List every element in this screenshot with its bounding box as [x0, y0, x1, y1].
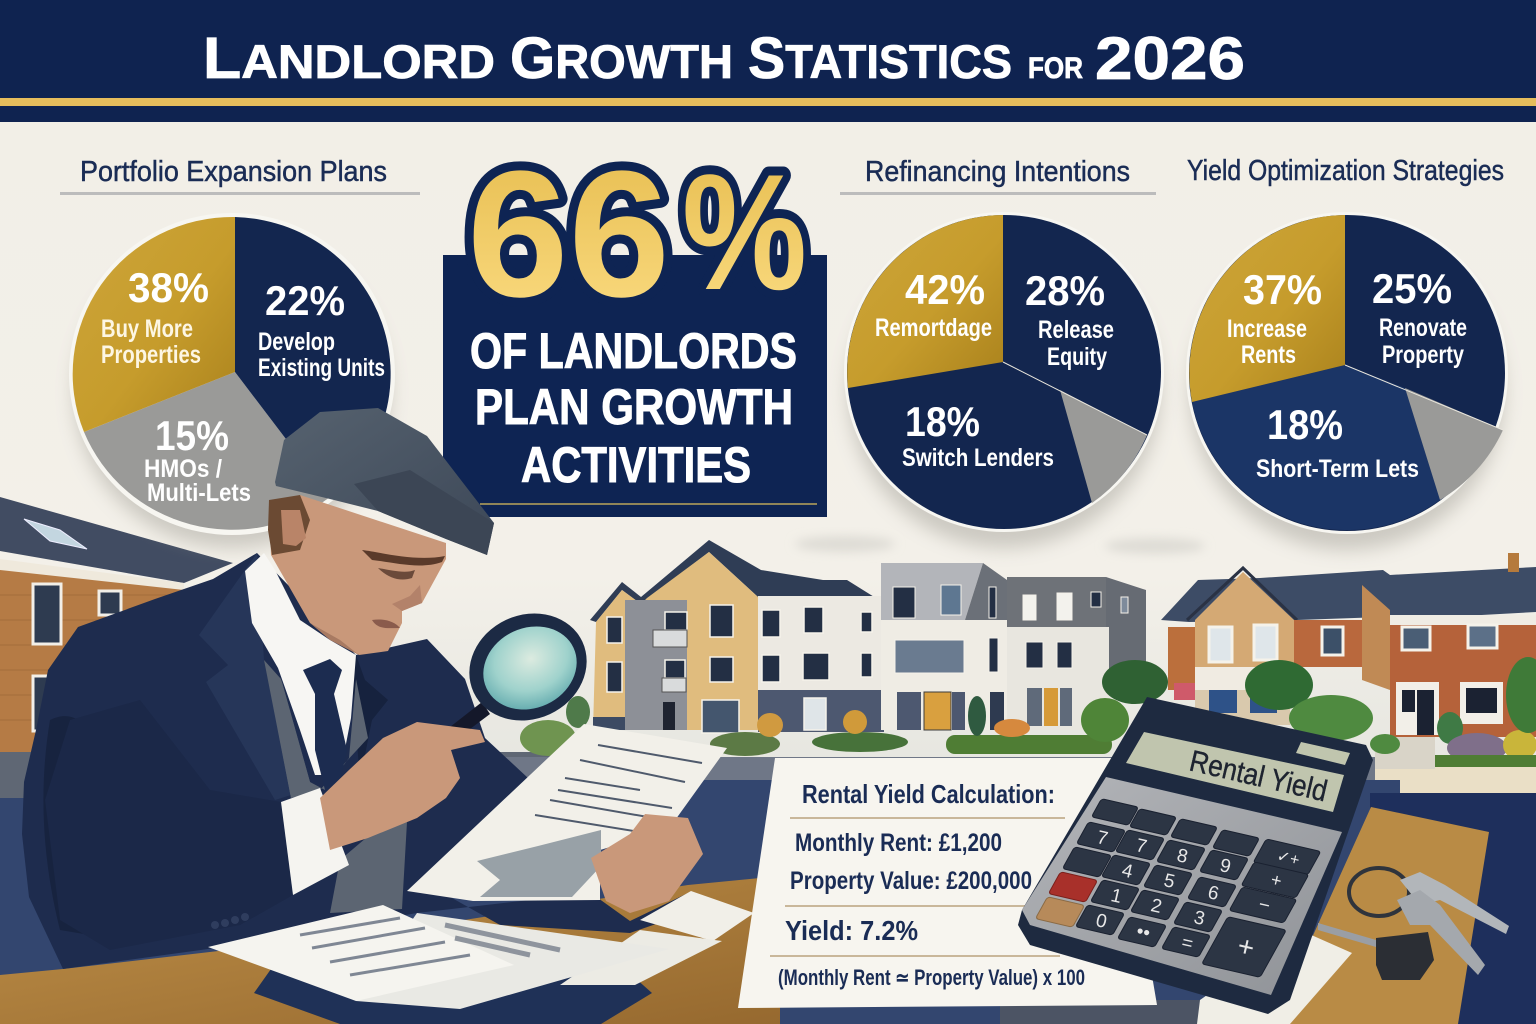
pie labels: yield: Property	[1382, 341, 1464, 369]
clouds	[795, 536, 1205, 554]
calculator key labels: ••	[1134, 921, 1152, 944]
pie labels: yield: 18%	[1267, 401, 1343, 448]
heading: portfolio expansion plans: Portfolio Expansion Plans	[80, 156, 387, 188]
calculator key labels: 9	[1218, 855, 1233, 878]
left house	[0, 497, 233, 752]
pie labels: portfolio: Develop	[258, 328, 335, 356]
calculator key labels: 1	[1109, 885, 1124, 908]
calculator key labels: 0	[1094, 910, 1109, 933]
pie labels: portfolio: Buy More	[101, 315, 193, 343]
pie labels: refinancing: 28%	[1025, 267, 1105, 314]
modern white building	[881, 563, 1146, 730]
calculator display	[1126, 732, 1350, 812]
pie labels: refinancing: Remortdage	[875, 314, 992, 342]
calculator key labels: +	[1269, 869, 1284, 891]
documents on table	[208, 891, 754, 1024]
flat cap	[275, 408, 494, 555]
facial features	[310, 550, 445, 655]
panel: yield optimization strategies	[1186, 155, 1508, 550]
callout text: PLAN GROWTH	[475, 379, 793, 435]
wooden table	[0, 807, 1489, 1024]
big statistic: %	[682, 140, 807, 324]
jacket shading	[43, 716, 190, 940]
big statistic: 66	[467, 134, 670, 335]
pie chart: refinancing	[844, 212, 1164, 532]
calculator	[1018, 697, 1373, 1014]
pie labels: yield: 37%	[1243, 266, 1322, 313]
central tan apartment building	[590, 540, 887, 733]
face	[269, 495, 446, 655]
house keys	[1197, 868, 1509, 1024]
pie labels: portfolio: 15%	[155, 412, 229, 459]
calculator key labels	[1094, 827, 1301, 964]
pie labels: portfolio: 38%	[128, 264, 209, 311]
title: FOR	[1028, 52, 1083, 85]
background sky	[0, 120, 1536, 770]
hand holding magnifier	[320, 722, 485, 850]
document in hand	[407, 724, 727, 901]
pie labels: portfolio: 22%	[265, 277, 345, 324]
man with magnifying glass	[22, 408, 727, 969]
hair and ear	[268, 495, 310, 555]
calculator key labels: −	[1256, 894, 1272, 917]
pie labels: yield: Renovate	[1379, 314, 1467, 342]
pie chart: portfolio	[69, 213, 395, 535]
pie labels: yield: Rents	[1241, 341, 1296, 369]
calculator keys	[1035, 799, 1321, 977]
calculator key labels: 8	[1175, 845, 1190, 868]
tie	[303, 659, 347, 790]
calculator key labels: +	[1235, 930, 1258, 964]
pie labels: yield: Short-Term Lets	[1256, 455, 1419, 483]
calculator key labels: ✓+	[1275, 848, 1301, 869]
sleeve buttons	[211, 913, 249, 929]
calculator display: Rental Yield	[1186, 745, 1330, 808]
pie labels: refinancing: Release	[1038, 316, 1114, 344]
property value: Property Value: £200,000	[790, 867, 1032, 895]
calculator key labels: 2	[1149, 895, 1164, 918]
shirt	[245, 553, 356, 775]
pie labels: refinancing: 18%	[905, 398, 980, 445]
calculator key labels: 7	[1095, 827, 1110, 850]
panel: 66 percent callout	[443, 134, 827, 517]
title	[203, 25, 1245, 92]
jacket lapel	[199, 553, 291, 800]
panel: portfolio expansion plans	[60, 156, 420, 548]
waistcoat	[264, 660, 407, 913]
pie labels: portfolio: Properties	[101, 341, 201, 369]
pie labels: yield	[1227, 265, 1467, 483]
heading: refinancing intentions: Refinancing Intentions	[865, 156, 1130, 188]
monthly rent: Monthly Rent: £1,200	[795, 829, 1002, 857]
panel: refinancing intentions	[840, 156, 1164, 548]
pie labels: portfolio: Existing Units	[258, 354, 385, 382]
pie labels: portfolio: HMOs /	[144, 455, 222, 483]
suit jacket	[22, 553, 688, 969]
yield: Yield: 7.2%	[785, 915, 918, 946]
title: STATISTICS	[748, 26, 1012, 91]
pie labels: refinancing	[875, 266, 1114, 472]
formula: (Monthly Rent ≃ Property Value) x 100	[778, 965, 1085, 990]
shrubs and gardens	[520, 657, 1536, 767]
calculator key labels: 6	[1206, 882, 1221, 905]
title: GROWTH	[510, 26, 733, 91]
ground and street	[0, 752, 1536, 1024]
hand holding document	[591, 814, 703, 913]
callout text	[470, 323, 797, 493]
calculator key labels: 4	[1120, 860, 1135, 883]
header banner	[0, 0, 1536, 122]
pie labels: portfolio: Multi-Lets	[147, 479, 251, 507]
calculator key labels: 5	[1162, 870, 1177, 893]
calculator key labels: 7	[1134, 835, 1149, 858]
calculator key labels: =	[1179, 932, 1195, 955]
magnifying glass	[450, 595, 604, 739]
pie labels: yield: Increase	[1227, 315, 1307, 343]
callout text: ACTIVITIES	[521, 437, 751, 493]
pie chart: yield	[1186, 212, 1508, 534]
big statistic	[467, 134, 807, 335]
pie labels: refinancing: Switch Lenders	[902, 444, 1054, 472]
pie labels: refinancing: Equity	[1047, 343, 1107, 371]
pie labels: yield: 25%	[1372, 265, 1452, 312]
title: 2026	[1095, 25, 1245, 92]
near arm sleeve	[45, 700, 293, 950]
calculator key labels: 3	[1192, 907, 1207, 930]
title: LANDLORD	[203, 26, 495, 91]
sheet heading: Rental Yield Calculation:	[802, 779, 1055, 809]
right row of houses	[1161, 553, 1536, 769]
callout text: OF LANDLORDS	[470, 323, 797, 379]
pie labels: refinancing: 42%	[905, 266, 985, 313]
rental yield calculation sheet	[738, 758, 1157, 1008]
pie labels: portfolio	[101, 264, 385, 507]
shirt cuff	[281, 788, 349, 895]
